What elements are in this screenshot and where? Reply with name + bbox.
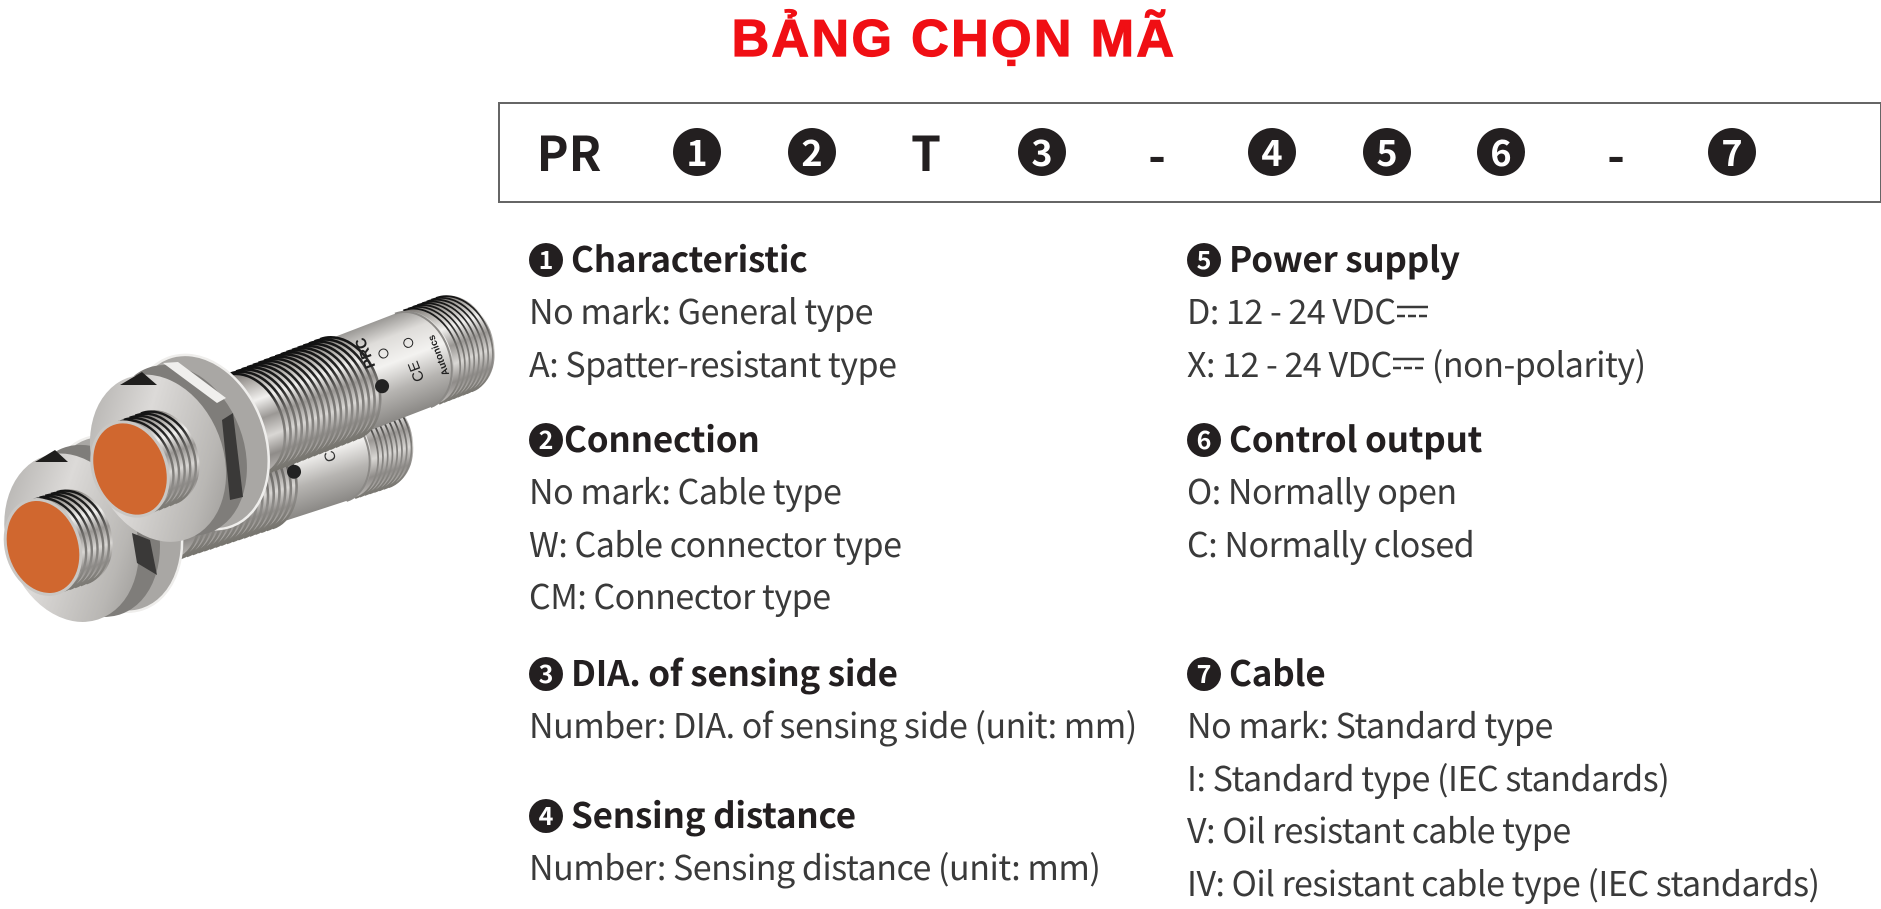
- panel: characteristic: Characteristic: [571, 232, 808, 283]
- panel: cable: [1187, 646, 1820, 906]
- panel: sensing distance: 4: [539, 796, 553, 832]
- model code box: PR: [537, 115, 601, 185]
- panel: control output: [1187, 412, 1482, 567]
- sensor: rear unit: [0, 342, 438, 644]
- panel: connection: W: Cable connector type: [529, 518, 902, 567]
- panel: cable: I: Standard type (IEC standards): [1187, 752, 1669, 801]
- panel: power supply: [1187, 232, 1646, 387]
- panel: power supply: D: 12 - 24 VDC: [1187, 285, 1396, 334]
- panel: connection: Connection: [564, 412, 760, 463]
- panel: dia of sensing side: 3: [539, 654, 553, 690]
- panel: cable: Cable: [1229, 646, 1325, 697]
- model code box: 1: [686, 125, 708, 177]
- panel: control output: O: Normally open: [1187, 465, 1457, 514]
- sensor markings: PRC: [352, 335, 379, 371]
- model code box: 5: [1376, 125, 1398, 177]
- panel: dia of sensing side: DIA. of sensing side: [571, 646, 898, 697]
- model code box: 3: [1031, 125, 1053, 177]
- panel: dia of sensing side: Number: DIA. of sensing side (unit: mm): [529, 699, 1137, 748]
- panel: characteristic: [529, 232, 896, 387]
- model code box: 6: [1490, 125, 1512, 177]
- panel: connection: [529, 412, 902, 619]
- model code box: 7: [1721, 125, 1743, 177]
- panel: power supply: X: 12 - 24 VDC (non-polarity): [1187, 338, 1646, 387]
- model code box: -: [1148, 117, 1166, 187]
- model code box: 2: [801, 125, 823, 177]
- panel: control output: C: Normally closed: [1187, 518, 1474, 567]
- panel: power supply: 5: [1197, 240, 1211, 276]
- model code box: T: [911, 115, 941, 185]
- panel: sensing distance: [529, 788, 1100, 890]
- sensor markings: [352, 312, 452, 403]
- panel: connection: 2: [539, 420, 553, 456]
- panel: power supply: Power supply: [1229, 232, 1460, 283]
- panel: sensing distance: Number: Sensing distance (unit: mm): [529, 841, 1100, 890]
- panel: dia of sensing side: [529, 646, 1137, 748]
- model code box: -: [1607, 117, 1625, 187]
- panel: connection: No mark: Cable type: [529, 465, 841, 514]
- panel: cable: V: Oil resistant cable type: [1187, 804, 1571, 853]
- panel: cable: No mark: Standard type: [1187, 699, 1553, 748]
- panel: sensing distance: Sensing distance: [571, 788, 856, 839]
- panel: control output: Control output: [1229, 412, 1482, 463]
- model code box: 4: [1261, 125, 1283, 177]
- panel: characteristic: No mark: General type: [529, 285, 873, 334]
- panel: control output: 6: [1197, 420, 1211, 456]
- model code box: [498, 102, 1881, 203]
- panel: characteristic: 1: [539, 240, 553, 276]
- sensor markings: CE: [405, 359, 428, 384]
- panel: cable: 7: [1197, 654, 1211, 690]
- sensor: front unit: [62, 247, 523, 567]
- sensor markings: Autonics: [426, 333, 452, 377]
- sensor: rear unit: C: [321, 448, 340, 464]
- title: BẢNG CHỌN MÃ: [732, 10, 1176, 68]
- panel: cable: IV: Oil resistant cable type (IEC standards): [1187, 857, 1820, 906]
- panel: connection: CM: Connector type: [529, 570, 831, 619]
- panel: characteristic: A: Spatter-resistant type: [529, 338, 896, 387]
- illustration: two proximity sensors: [4, 295, 495, 622]
